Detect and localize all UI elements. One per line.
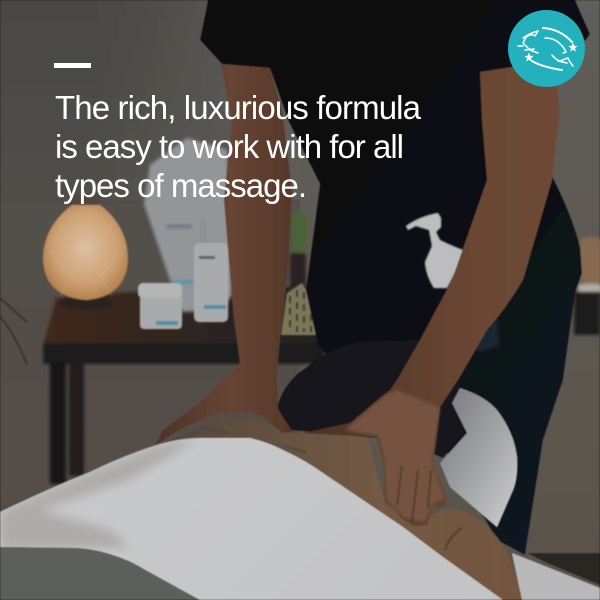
accent dash [54,63,91,68]
pocket on trousers [470,318,500,352]
therapist left arm and hand [155,64,293,445]
hand highlight and finger creases [345,390,445,522]
plant leaves at left edge [0,298,27,365]
small jar [138,283,182,329]
plate and pale object at right edge [578,237,600,292]
tattoo on back [172,428,306,452]
sheet right of patient [512,553,600,600]
diffuser lamp [43,196,128,309]
patient back [157,418,523,600]
woven basket on table [281,283,320,335]
large product bag [144,138,232,312]
therapist body: shirt and trousers [200,0,590,555]
patient hair [277,340,467,458]
small plant and pot behind arm [290,212,308,290]
sheet upper fold [0,438,200,548]
table with dark top and legs [43,286,600,484]
headline: types of massage. [55,167,307,204]
therapist right arm and hand [303,60,560,526]
massage product containers [138,138,232,329]
bunny and arcs [518,28,573,70]
patient arm crease [445,528,462,550]
headline: is easy to work with for all [55,128,404,165]
headline [55,89,422,204]
stars [524,42,578,62]
pump bottle at waist [406,213,463,288]
badge: leaping bunny logo [508,10,585,87]
grey blanket bottom left [0,547,200,600]
pump bottle [194,219,228,322]
face cradle pillow [440,388,517,527]
white sheet over patient [0,437,504,600]
floor dark band [527,553,600,585]
headline: The rich, luxurious formula [55,89,422,126]
